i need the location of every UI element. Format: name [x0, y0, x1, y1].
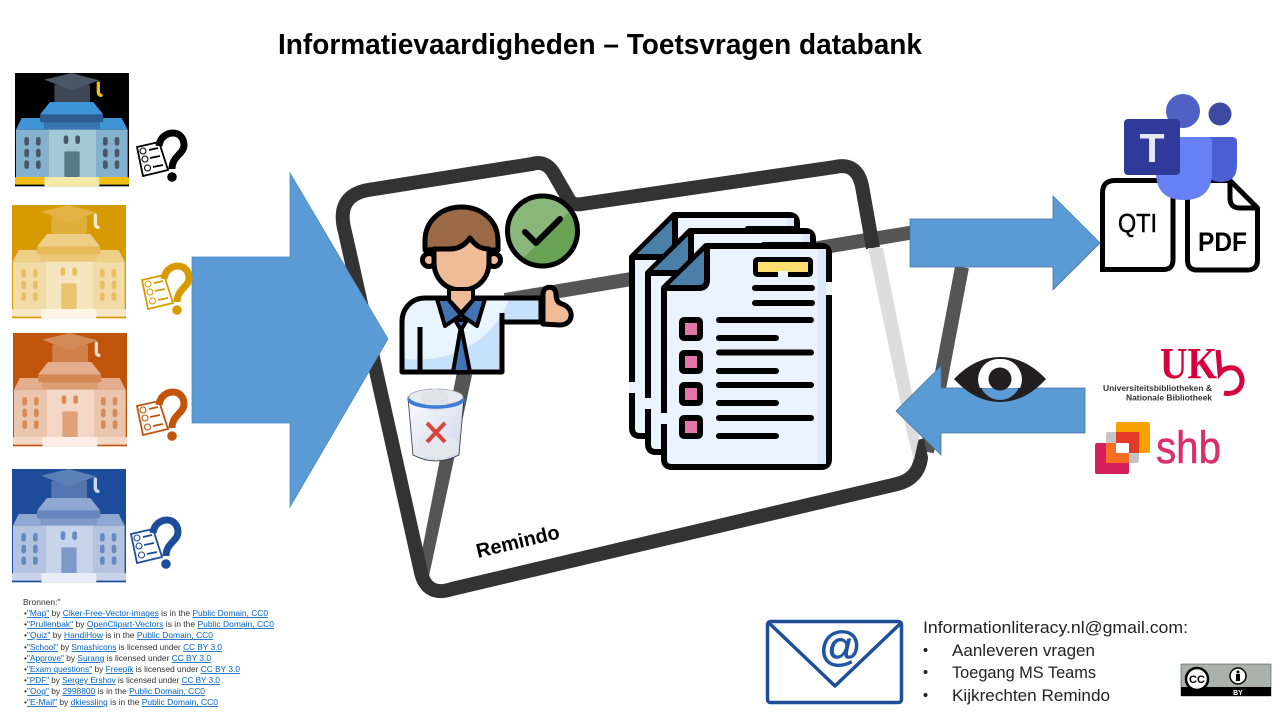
arrow: input to folder [192, 173, 388, 507]
icon: person approving [402, 207, 571, 372]
person collar and tie [437, 299, 485, 372]
icon: school blue [12, 469, 126, 582]
folder back sheet [421, 232, 962, 576]
person neck [449, 289, 473, 313]
text block: sources: •"Map" by Clker-Free-Vector-images is in the Public Domain, CC0 [24, 608, 268, 618]
icon: quiz blue [131, 520, 178, 569]
icon: MS Teams [1124, 94, 1237, 200]
icon: quiz gold [142, 266, 189, 315]
icon: document stack [629, 215, 832, 467]
arrow: view rights [896, 366, 1085, 455]
contact address: Informationliteracy.nl@gmail.com: [923, 618, 1188, 637]
logo: UKB: Universiteitsbibliotheken & [1103, 383, 1212, 393]
icon: school black [15, 73, 129, 186]
folder light side [868, 248, 920, 460]
logo: shb: shb [1156, 422, 1221, 473]
icon: approve check [508, 196, 578, 266]
icon: e-mail envelope [768, 622, 902, 702]
title: Informatievaardigheden – Toetsvragen databank [278, 29, 923, 61]
school 2 with quiz [12, 205, 189, 318]
person ears [422, 254, 500, 266]
person hair [425, 207, 498, 250]
icon: MS Teams: T [1139, 125, 1165, 171]
icon: eye [954, 357, 1046, 402]
school 3 with quiz [13, 333, 184, 446]
icon: school gold [12, 205, 126, 318]
text block: sources: •"Quiz" by HandiHow is in the Public Domain, CC0 [24, 630, 213, 640]
logo: UKB [1103, 339, 1242, 402]
logo: UKB: UK [1160, 339, 1217, 388]
contact list item 3: Kijkrechten Remindo [952, 686, 1110, 705]
folder label: Remindo [474, 522, 562, 563]
icon: QTI file: QTI [1118, 208, 1157, 238]
folder front outline [343, 163, 921, 591]
text block: sources: •"PDF" by Sergey Ershov is licensed under CC BY 3.0 [24, 675, 220, 685]
person shirt [402, 298, 541, 372]
icon: quiz black [137, 133, 184, 182]
text block: sources: •"Approve" by Surang is licensed under CC BY 3.0 [24, 653, 211, 663]
text block: sources [23, 597, 274, 707]
icon: QTI file [1102, 180, 1173, 270]
text block: sources: Bronnen:" [23, 597, 61, 607]
icon: recycle bin [408, 388, 464, 461]
document question rows [682, 320, 811, 436]
school 4 with quiz [12, 469, 178, 582]
badge: CC BY: BY [1233, 690, 1243, 697]
icon: PDF file [1188, 180, 1258, 270]
contact list item 1: Aanleveren vragen [952, 641, 1095, 660]
person hand [543, 287, 571, 325]
contact list item 2: Toegang MS Teams [952, 663, 1096, 682]
text block: sources: •"School" by Smashicons is licensed under CC BY 3.0 [24, 642, 222, 652]
contact text [923, 618, 1188, 705]
arrow: export [910, 196, 1100, 290]
text block: sources: •"Exam questions" by Freepik is licensed under CC BY 3.0 [24, 664, 240, 674]
badge: CC BY [1181, 664, 1271, 697]
logo: shb [1095, 422, 1221, 474]
icon: e-mail envelope: @ [819, 623, 862, 670]
text block: sources: •"Prullenbak" by OpenClipart-Vectors is in the Public Domain, CC0 [24, 619, 274, 629]
person face [434, 238, 489, 290]
badge: CC BY: CC [1189, 674, 1205, 686]
text block: sources: •"Oog" by 2998800 is in the Public Domain, CC0 [24, 686, 205, 696]
document header tag [755, 260, 812, 303]
icon: quiz orange [137, 392, 184, 441]
logo: UKB: Nationale Bibliotheek [1126, 392, 1212, 402]
panel: folder Remindo [343, 163, 962, 591]
school 1 with quiz [15, 73, 184, 186]
export formats [1102, 94, 1258, 270]
text block: sources: •"E-Mail" by dkiessling is in the Public Domain, CC0 [24, 697, 218, 707]
icon: school orange [13, 333, 127, 446]
icon: PDF file: PDF [1198, 227, 1247, 257]
